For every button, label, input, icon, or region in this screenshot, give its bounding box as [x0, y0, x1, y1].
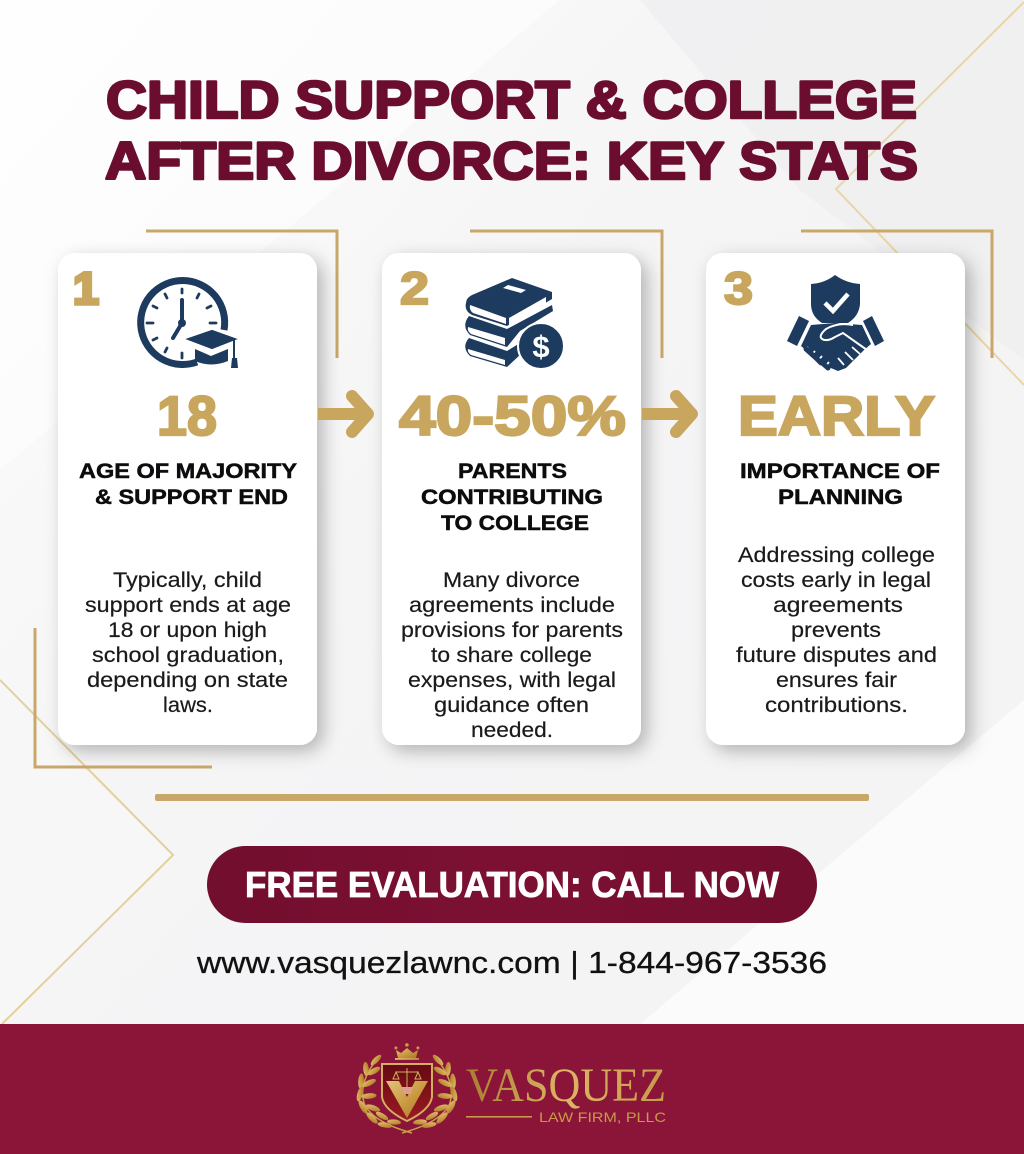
- divider: [155, 794, 869, 801]
- body text: to share college: [431, 643, 592, 667]
- heading: PARENTS: [458, 459, 567, 483]
- number 1: 1: [73, 263, 99, 314]
- heading: [421, 459, 603, 535]
- logo subtitle: LAW FIRM, PLLC: [539, 1109, 666, 1125]
- number 2: 2: [400, 263, 429, 314]
- logo: Vasquez Law Firm: [355, 1043, 666, 1133]
- body text: depending on state: [87, 668, 288, 692]
- body text: expenses, with legal: [408, 668, 616, 692]
- body text: support ends at age: [85, 593, 291, 617]
- call to action button: [207, 846, 817, 923]
- panel: card 1: [58, 253, 317, 745]
- body text: needed.: [471, 718, 553, 742]
- body text: Addressing college: [738, 543, 935, 567]
- body text: school graduation,: [92, 643, 284, 667]
- body text: ensures fair: [776, 668, 897, 692]
- body text: agreements: [773, 593, 903, 617]
- body text: costs early in legal: [741, 568, 931, 592]
- heading: IMPORTANCE OF: [740, 459, 940, 483]
- logo wreath: [355, 1053, 459, 1133]
- call to action button: FREE EVALUATION: CALL NOW: [245, 864, 779, 905]
- arrow: card 2 to card 3: [642, 396, 692, 432]
- icon: books with dollar coin: [465, 278, 564, 369]
- body text: laws.: [163, 693, 213, 717]
- body text: Typically, child: [113, 568, 262, 592]
- body text: 18 or upon high: [108, 618, 267, 642]
- body text: future disputes and: [736, 643, 937, 667]
- logo crown: [394, 1043, 420, 1060]
- gold corner frames: [35, 231, 992, 767]
- body text: provisions for parents: [401, 618, 623, 642]
- arrow: card 1 to card 2: [318, 396, 368, 432]
- title: [105, 71, 918, 191]
- heading: [740, 459, 940, 509]
- body text: agreements include: [409, 593, 615, 617]
- body text: [85, 568, 291, 717]
- title: CHILD SUPPORT & COLLEGE: [106, 71, 917, 130]
- icon: clock with graduation cap: [141, 281, 240, 368]
- number 3: 3: [724, 263, 753, 314]
- logo shield: [382, 1064, 432, 1121]
- contact line: www.vasquezlawnc.com | 1-844-967-3536: [196, 945, 827, 980]
- stat: EARLY: EARLY: [738, 384, 935, 447]
- icon: shield and handshake: [787, 275, 884, 371]
- body text: prevents: [791, 618, 881, 642]
- heading: & SUPPORT END: [95, 485, 288, 509]
- icon: books with dollar coin: $: [532, 329, 550, 364]
- footer band: [0, 1024, 1024, 1154]
- body text: Many divorce: [443, 568, 580, 592]
- heading: TO COLLEGE: [441, 511, 589, 535]
- body text: guidance often: [434, 693, 589, 717]
- heading: AGE OF MAJORITY: [79, 459, 297, 483]
- logo rule: [466, 1116, 532, 1118]
- heading: CONTRIBUTING: [421, 485, 603, 509]
- heading: PLANNING: [778, 485, 903, 509]
- logo name: VASQUEZ: [466, 1060, 666, 1112]
- title: AFTER DIVORCE: KEY STATS: [105, 132, 918, 191]
- body text: [736, 543, 937, 717]
- stat: 40-50%: 40-50%: [399, 384, 626, 447]
- heading: [79, 459, 297, 509]
- body text: [401, 568, 623, 742]
- stat: 18: 18: [157, 384, 217, 447]
- panel: card 2: [382, 253, 641, 745]
- panel: card 3: [706, 253, 965, 745]
- body text: contributions.: [765, 693, 908, 717]
